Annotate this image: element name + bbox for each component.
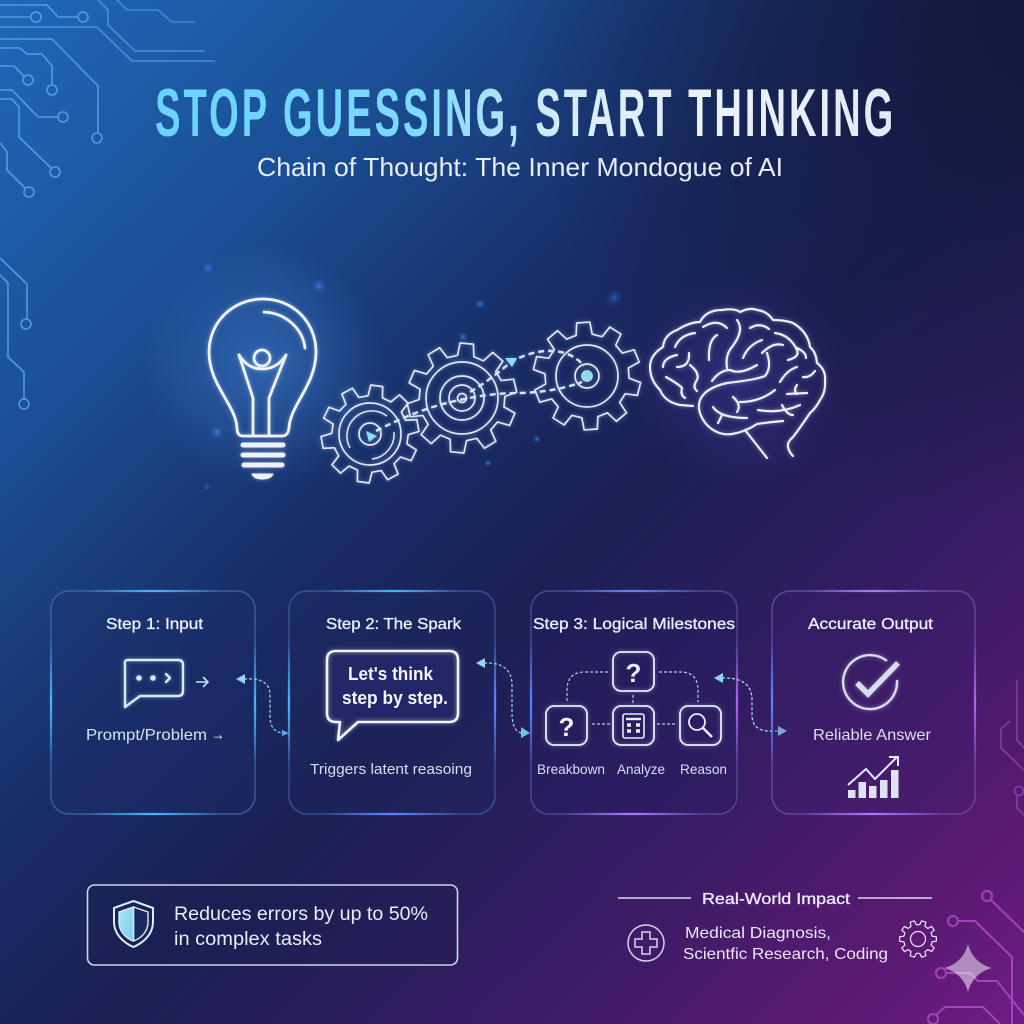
speech bubble callout: step by step. <box>342 688 448 708</box>
callout: error reduction <box>88 885 458 965</box>
icon: settings gear <box>895 916 941 962</box>
heading: accurate output: Accurate Output <box>808 616 934 633</box>
icon: brain <box>650 309 825 458</box>
icon: shield <box>114 901 153 947</box>
panel: step 2 the spark <box>288 590 496 815</box>
section: real-world impact <box>618 891 941 963</box>
circuit traces: right edge <box>1001 680 1024 815</box>
panel: accurate output <box>771 590 976 815</box>
panel: step 3 logical milestones <box>530 590 738 815</box>
label: breakbown: Breakbown <box>537 761 605 777</box>
heading: step 3: Step 3: Logical Milestones <box>533 616 735 633</box>
label: prompt: Prompt/Problem <box>86 727 207 744</box>
heading: real-world impact: Real-World Impact <box>702 891 851 908</box>
icon: magnifier <box>680 706 721 745</box>
icon: question top: ? <box>626 658 641 688</box>
arrow: step 3 to output <box>714 673 787 736</box>
speech bubble callout: Let's think <box>348 664 434 684</box>
dashed connectors <box>567 672 698 724</box>
text: fields: Medical Diagnosis, <box>685 925 831 942</box>
icon: growth chart <box>848 757 898 798</box>
icon: calculator <box>613 706 654 745</box>
section: real-world impact: Scientfic Research, Coding <box>683 946 888 963</box>
label: reliable answer: Reliable Answer <box>813 727 932 744</box>
label: reason: Reason <box>680 761 727 777</box>
gear 1 <box>316 379 424 489</box>
icon: sparkle star <box>944 944 992 992</box>
callout: error reduction: in complex tasks <box>174 929 322 950</box>
icon: check circle <box>843 655 898 709</box>
arrow: step 1 to step 2 <box>236 674 289 736</box>
heading: step 2: Step 2: The Spark <box>326 616 462 633</box>
label: prompt arrow: → <box>211 724 225 744</box>
gear 2 <box>403 339 521 457</box>
icon: question top <box>613 652 654 691</box>
icon: three linked gears <box>316 319 644 489</box>
title: STOP GUESSING, START THINKING <box>155 74 893 151</box>
icon: medical cross <box>628 925 664 961</box>
gear 3 <box>530 319 644 433</box>
label: analyze: Analyze <box>617 761 665 777</box>
label: triggers: Triggers latent reasoing <box>310 761 472 778</box>
circuit traces: bottom right <box>928 891 1024 1024</box>
subtitle: Chain of Thought: The Inner Mondogue of AI <box>257 152 783 182</box>
icon: chat bubble with dots <box>125 660 183 707</box>
icon: light bulb <box>209 299 316 479</box>
panel: step 1 input <box>50 590 256 815</box>
text: error reduction: Reduces errors by up to 50% <box>174 904 428 925</box>
speech bubble callout <box>327 651 458 740</box>
arrow: step 2 to step 3 <box>476 658 530 738</box>
heading: step 1: Step 1: Input <box>106 616 204 633</box>
icon: question left: ? <box>559 712 574 742</box>
particles <box>202 262 623 491</box>
icon: small arrow <box>196 677 208 687</box>
icon: question left <box>546 706 587 745</box>
dashed thought paths <box>376 351 584 431</box>
circuit traces: top left <box>0 0 215 409</box>
